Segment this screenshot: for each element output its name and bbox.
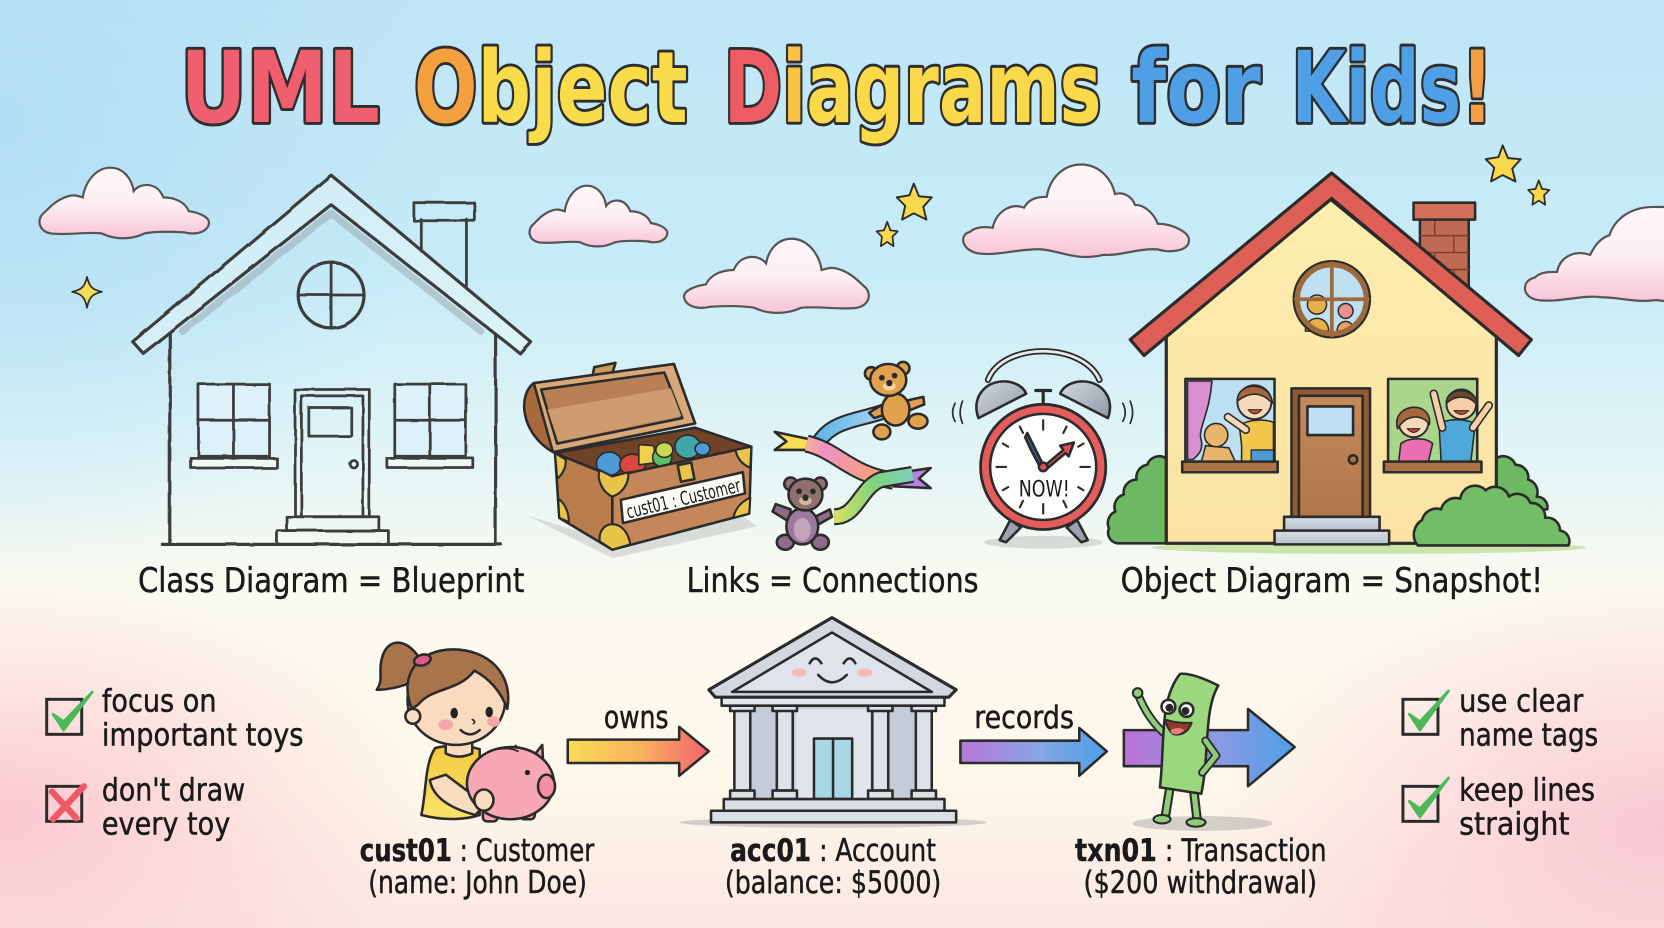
tip text (1459, 773, 1595, 843)
red roof (1130, 173, 1531, 355)
tip text: important toys (102, 717, 304, 753)
tip: do not draw every toy (47, 773, 245, 843)
transaction arrow behind money (1124, 709, 1295, 786)
chest cavity (555, 428, 751, 476)
chest name tag (621, 472, 745, 523)
clock legs (1000, 520, 1088, 542)
grey steps (1275, 517, 1389, 544)
class diagram blueprint house (133, 175, 531, 544)
tip text (102, 773, 245, 843)
tip text: every toy (102, 807, 230, 843)
house wall (1166, 200, 1496, 543)
hair band (413, 653, 432, 667)
blue ribbon (819, 412, 883, 441)
checkbox (1403, 691, 1449, 734)
clock minute hand (1043, 443, 1074, 470)
blueprint right window (387, 384, 473, 468)
arrow: records (960, 700, 1107, 776)
chest brass corners (555, 447, 751, 550)
chest name tag: cust01 : Customer (624, 474, 743, 523)
bank face (792, 658, 872, 682)
arm (430, 775, 488, 815)
title: for (1131, 31, 1261, 146)
arrow: owns (568, 700, 709, 776)
label: links: Links = Connections (687, 561, 978, 601)
front bush (1414, 486, 1569, 545)
ear (405, 709, 420, 724)
clock NOW text: NOW! (1019, 477, 1070, 503)
chest lock (678, 462, 694, 482)
back bushes (1108, 456, 1547, 543)
cloud 4 (963, 164, 1189, 257)
right window with children (1384, 379, 1489, 472)
clock body (981, 404, 1106, 530)
chest clasp (592, 363, 616, 378)
bank pediment (709, 618, 956, 697)
girl with piggy bank (377, 643, 555, 821)
face (1162, 700, 1193, 735)
chest lid frame (534, 364, 695, 452)
label: acc01: (balance: $5000) (725, 865, 941, 901)
tip text (1459, 684, 1598, 753)
owns label: owns (604, 700, 669, 736)
bank base (711, 799, 956, 822)
clock ticks (996, 420, 1090, 514)
treasure chest (524, 363, 757, 558)
shirt (421, 746, 480, 819)
label: cust01: cust01 : Customer (360, 833, 595, 869)
cross box (47, 786, 84, 821)
teddy bear top (865, 362, 928, 439)
piggy bank (467, 745, 555, 821)
ground (1151, 541, 1587, 554)
blueprint round window (298, 262, 364, 328)
label: txn01: txn01 : Transaction (1075, 833, 1327, 869)
green ribbon (834, 474, 913, 517)
label: cust01: (name: John Doe) (368, 865, 587, 901)
star: center small (877, 222, 898, 246)
blueprint left window (191, 384, 277, 468)
label: object diagram: Object Diagram = Snapshot! (1121, 561, 1543, 601)
tip text: keep lines (1459, 773, 1595, 809)
checkbox (47, 692, 92, 734)
star: right small (1528, 180, 1549, 205)
label: class diagram: Class Diagram = Blueprint (138, 561, 524, 601)
blueprint steps (277, 517, 388, 544)
clock stem (1036, 391, 1051, 405)
star: center large (897, 184, 932, 220)
cloud 3 (684, 239, 869, 313)
brown door (1292, 388, 1370, 518)
chest shadow (527, 516, 757, 558)
tip: keep lines straight (1403, 773, 1595, 843)
label: cust01 (360, 833, 595, 901)
title: Kids! (1292, 31, 1493, 146)
label: acc01 (725, 833, 941, 901)
bank shadow (679, 817, 987, 828)
round window with toys (1294, 261, 1370, 337)
blueprint roof (133, 175, 531, 353)
tip text: straight (1459, 807, 1570, 843)
title: Diagrams (724, 31, 1102, 146)
clock motion lines (953, 401, 1133, 423)
cloud 2 (530, 186, 667, 246)
object snapshot house (1108, 173, 1587, 554)
clock shadow (984, 536, 1103, 549)
bank wall (743, 705, 923, 799)
connection ribbons (775, 412, 931, 517)
bank entablature (722, 695, 944, 706)
title: Object (414, 31, 688, 146)
chimney (1414, 203, 1475, 293)
tip: use clear name tags (1403, 684, 1598, 753)
body (1160, 674, 1218, 794)
star: sparkle left (72, 277, 102, 308)
clock face (990, 414, 1096, 520)
cloud 5 (1525, 207, 1664, 302)
title (180, 31, 1493, 146)
cloud 1 (39, 168, 209, 238)
tip: focus on important toys (47, 684, 304, 753)
clock handle (988, 351, 1099, 380)
checkbox (1403, 778, 1449, 821)
label: acc01: acc01 : Account (730, 833, 936, 869)
shadow (1132, 816, 1272, 831)
tip text: use clear (1459, 684, 1584, 720)
clock bells (976, 381, 1110, 418)
records arrow (960, 728, 1107, 776)
owns arrow (568, 727, 709, 776)
clock hour hand (1025, 433, 1043, 467)
ponytail (377, 643, 422, 690)
blueprint walls (162, 332, 501, 544)
chest lid interior (541, 372, 682, 444)
records label: records (974, 700, 1074, 736)
tip text: name tags (1459, 717, 1598, 753)
blueprint chimney (414, 203, 474, 289)
tip text (102, 684, 304, 753)
right arm on hip (1202, 741, 1216, 773)
chest front and side (555, 447, 751, 550)
neck (446, 736, 472, 757)
alarm clock (953, 351, 1133, 549)
arm (1133, 688, 1163, 732)
tip text: focus on (102, 684, 216, 720)
bank columns (730, 705, 936, 799)
bank building (679, 618, 987, 828)
label: txn01: ($200 withdrawal) (1084, 865, 1317, 901)
hair (407, 649, 508, 709)
teddy bear bottom (773, 478, 832, 550)
money character (1132, 674, 1272, 831)
chest toys (596, 435, 710, 475)
tip text: don't draw (102, 773, 245, 809)
chest lid (524, 364, 695, 452)
bank door (814, 739, 852, 799)
hand (474, 790, 493, 811)
pink ribbon with yellow and purple tails (775, 432, 931, 488)
title: UML (180, 31, 380, 146)
head (408, 656, 505, 745)
label: txn01 (1075, 833, 1327, 901)
left window with boy and bear (1182, 379, 1278, 472)
blueprint door (295, 389, 369, 517)
legs (1154, 791, 1206, 827)
face (438, 707, 500, 734)
star: right large (1486, 145, 1521, 181)
